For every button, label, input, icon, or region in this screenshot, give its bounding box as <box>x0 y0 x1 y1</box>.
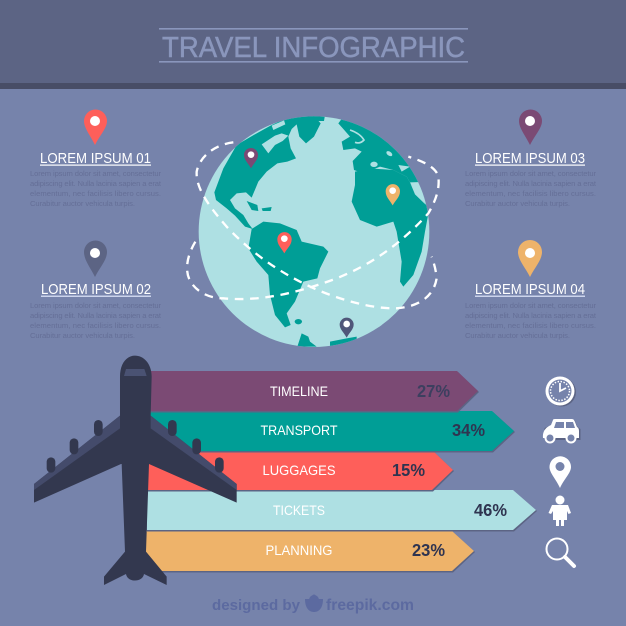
bar: planning: 23% <box>412 540 445 560</box>
text block 02: elementum, nec facilisis libero cursus. <box>30 321 161 330</box>
text block 02 <box>30 301 162 340</box>
text block 01 <box>30 169 162 208</box>
icon: orange pin <box>518 240 542 277</box>
text block 04: adipiscing elit. Nulla lacinia sapien a erat <box>465 311 597 320</box>
title: TRAVEL INFOGRAPHIC <box>162 32 465 64</box>
icon: location pin <box>550 456 571 488</box>
footer credit: designed by <box>212 597 301 614</box>
bar: timeline: TIMELINE <box>270 383 328 399</box>
bar: luggages <box>148 450 454 492</box>
icon: car <box>543 419 580 442</box>
text block 03: elementum, nec facilisis libero cursus. <box>465 189 596 198</box>
text block 03 <box>465 169 597 208</box>
icon: slate map pin <box>340 318 354 338</box>
bar: timeline: 27% <box>417 381 450 401</box>
globe <box>187 113 439 347</box>
icon: red map pin <box>277 232 292 253</box>
bar chart <box>146 371 537 572</box>
text block 04: Curabitur auctor vehicula turpis. <box>465 331 570 340</box>
text block 04: elementum, nec facilisis libero cursus. <box>465 321 596 330</box>
heading 02: LOREM IPSUM 02 <box>41 282 151 298</box>
bar: planning <box>146 531 475 572</box>
text block 02: adipiscing elit. Nulla lacinia sapien a erat <box>30 311 162 320</box>
icon: orange map pin <box>386 184 400 205</box>
text block 01: elementum, nec facilisis libero cursus. <box>30 189 161 198</box>
heading 01: LOREM IPSUM 01 <box>40 151 151 167</box>
heading 04: LOREM IPSUM 04 <box>475 282 585 298</box>
icon: slate pin <box>84 240 107 277</box>
panel: lorem ipsum 04 <box>465 240 597 340</box>
heading 03: LOREM IPSUM 03 <box>475 151 585 167</box>
bar: planning: PLANNING <box>266 542 332 558</box>
footer credit: freepik.com <box>326 597 414 614</box>
text block 01: adipiscing elit. Nulla lacinia sapien a erat <box>30 179 162 188</box>
icon: red pin <box>84 110 107 145</box>
icon: purple pin <box>519 110 542 145</box>
text block 03: Lorem ipsum dolor sit amet, consectetur <box>465 169 596 178</box>
bar: transport: TRANSPORT <box>260 422 338 438</box>
flight paths <box>187 142 439 308</box>
panel: lorem ipsum 02 <box>30 240 162 340</box>
text block 01: Lorem ipsum dolor sit amet, consectetur <box>30 169 161 178</box>
bar: luggages: LUGGAGES <box>262 462 336 478</box>
footer credit <box>212 594 414 614</box>
icon: freepik logo <box>305 594 323 612</box>
bar: timeline <box>150 371 479 412</box>
bar: tickets <box>147 490 537 532</box>
panel: lorem ipsum 03 <box>465 110 597 208</box>
bar: transport <box>150 411 515 452</box>
text block 04 <box>465 301 597 340</box>
bar: tickets: 46% <box>474 500 507 520</box>
icon: person <box>548 496 571 526</box>
bar: transport: 34% <box>452 420 485 440</box>
text block 01: Curabitur auctor vehicula turpis. <box>30 199 135 208</box>
airplane <box>34 356 237 585</box>
icon: clock <box>546 376 576 406</box>
bar: luggages: 15% <box>392 460 425 480</box>
icon: purple map pin <box>244 148 258 168</box>
bar: tickets: TICKETS <box>273 502 325 518</box>
text block 02: Lorem ipsum dolor sit amet, consectetur <box>30 301 161 310</box>
panel: lorem ipsum 01 <box>30 110 162 208</box>
text block 04: Lorem ipsum dolor sit amet, consectetur <box>465 301 596 310</box>
text block 02: Curabitur auctor vehicula turpis. <box>30 331 135 340</box>
header band <box>0 0 626 89</box>
icon: magnifier <box>546 538 574 566</box>
text block 03: Curabitur auctor vehicula turpis. <box>465 199 570 208</box>
text block 03: adipiscing elit. Nulla lacinia sapien a erat <box>465 179 597 188</box>
